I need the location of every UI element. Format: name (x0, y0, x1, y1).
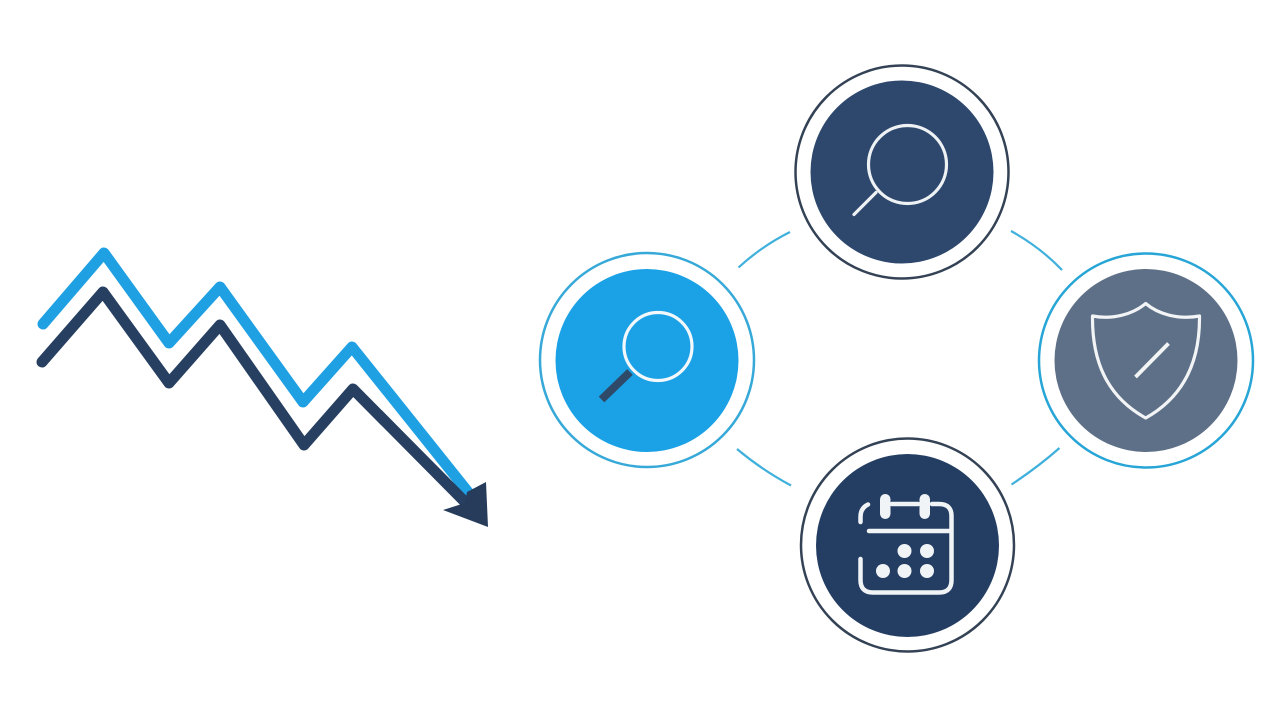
chart: declining zigzag arrow (42, 253, 488, 527)
outer ring (801, 438, 1014, 652)
dark trend line (42, 292, 466, 503)
outer ring (540, 253, 754, 467)
node: bottom calendar (801, 438, 1014, 652)
outer ring (796, 66, 1008, 278)
node: top search (796, 66, 1008, 278)
filled disc (556, 269, 738, 452)
arrowhead (443, 482, 488, 527)
icon: magnifier outline (854, 126, 946, 214)
connector: bottom to left (737, 449, 791, 486)
outer ring (1039, 254, 1253, 468)
connector: left to top (738, 232, 790, 268)
icon: calendar (860, 494, 952, 592)
blue trend line (43, 253, 472, 497)
node: right shield (1039, 254, 1253, 468)
filled disc (1054, 269, 1238, 452)
icon: magnifier with dark handle (602, 312, 692, 400)
filled disc (810, 80, 994, 264)
connector: right to bottom (1012, 448, 1060, 484)
icon: shield with slash (1092, 304, 1200, 418)
connector: top to right (1011, 231, 1062, 270)
filled disc (816, 454, 999, 637)
node: left search (540, 253, 754, 467)
